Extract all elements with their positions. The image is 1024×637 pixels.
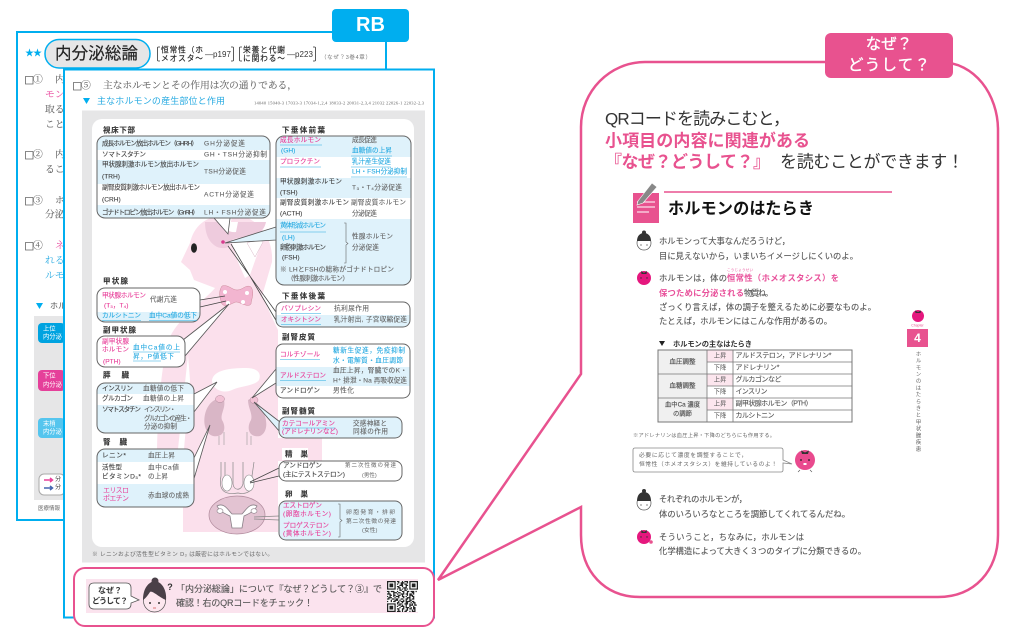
cross references: メオスタ〜 <box>161 54 203 63</box>
brain <box>205 222 266 248</box>
box: 副腎皮質: 水・電解質・血圧調節 <box>333 356 403 364</box>
dialogue 4: 化学構造によって大きく３つのタイプに分類できるの。 <box>659 546 866 556</box>
speech bubble: なぜ？どうして？: どうして？ <box>92 596 128 606</box>
checklist items: ④ <box>33 240 43 252</box>
stars: ★★ <box>25 48 42 58</box>
tab: なぜ？どうして？: なぜ？ <box>866 35 912 53</box>
box: 甲状腺: (T₃，T₄) <box>104 302 128 310</box>
dialogue 2 <box>659 267 876 326</box>
box: 腎臓: 血圧上昇 <box>148 450 175 460</box>
table: hormone functions: 上昇 <box>714 350 727 360</box>
icon: tomato large <box>795 450 815 472</box>
cross references: に関わる〜 <box>243 54 285 63</box>
hormone hierarchy sub-panel: 内分泌 <box>43 332 63 340</box>
checklist items <box>26 72 66 282</box>
box: 下垂体前葉: (ACTH) <box>280 210 302 218</box>
dialogue 2: こうじょうせい <box>727 267 754 272</box>
QR code <box>387 581 418 612</box>
table note: ※アドレナリンは血圧上昇・下降のどちらにも作用する。 <box>633 431 775 439</box>
table: hormone functions: アルドステロン，アドレナリン* <box>736 352 832 360</box>
box: 下垂体前葉: (GH) <box>281 148 295 154</box>
box: 下垂体前葉: 甲状腺刺激ホルモン <box>280 176 342 186</box>
box: 下垂体前葉: 成長促進 <box>352 135 377 144</box>
intro text: 『なぜ？どうして？』 <box>605 152 770 172</box>
panel: RB back page <box>17 32 386 520</box>
hormone hierarchy sub-panel: ホル <box>50 302 66 310</box>
box: 下垂体前葉: 分泌促進 <box>352 208 377 218</box>
eye <box>191 243 197 253</box>
prompt text: 確認！右のQRコードをチェック！ <box>176 597 313 608</box>
intro text <box>605 110 964 172</box>
box: 視床下部: GH・TSH分泌抑制 <box>204 150 267 158</box>
checklist items: ルモ <box>45 270 65 282</box>
exam references: 14040 15040-3 17033-3 17034-1,2,4 18033-2 20031-2,3,4 21032 22026-1 22032-2,3 <box>254 100 425 106</box>
box: 下垂体前葉: 性腺ホルモン <box>352 232 393 240</box>
icon: tomato <box>637 530 653 544</box>
box: 腎臓: 血中Ca値 <box>148 462 179 472</box>
checklist items: 取る <box>45 104 65 116</box>
box: 副甲状腺 <box>97 324 185 367</box>
box: 膵臓: 分泌の抑制 <box>144 422 177 430</box>
box: 膵臓: インスリン・ <box>144 406 176 414</box>
footnote: ※ レニンおよび活性型ビタミン D₃ は厳密にはホルモンではない。 <box>92 550 273 558</box>
box: 膵臓: 血糖値の上昇 <box>143 394 184 402</box>
hormone hierarchy sub-panel: 下位 <box>43 370 56 380</box>
icon: girl <box>143 578 173 612</box>
table: hormone functions: 下降 <box>714 386 727 396</box>
kidneys <box>204 399 224 436</box>
dialogue 1 <box>659 236 858 261</box>
box: 視床下部: GH分泌促進 <box>204 138 245 148</box>
table: hormone functions: 下降 <box>714 362 727 372</box>
box: 副腎髄質 <box>279 406 402 438</box>
table: hormone functions: 下降 <box>714 410 727 420</box>
box: 副腎皮質: 副腎皮質 <box>282 332 316 342</box>
box: 腎臓: 赤血球の成熟 <box>148 490 189 500</box>
box: 卵巣: 卵 巣 <box>285 488 308 498</box>
box: 精巣: 精 巣 <box>285 448 308 458</box>
chapter tab <box>907 310 928 453</box>
box: 卵巣: 第二次性徴の発達 <box>346 517 396 525</box>
table title: ホルモンの主なはたらき <box>673 340 752 348</box>
box: 腎臓: ポエチン <box>103 494 129 502</box>
box: 精巣: (男性) <box>362 471 377 479</box>
table: hormone functions: 血糖調整 <box>670 380 696 390</box>
box: 精巣: 第二次性徴の発達 <box>345 461 396 469</box>
testes <box>220 462 254 494</box>
box: 視床下部: 甲状腺刺激ホルモン放出ホルモン <box>102 160 199 168</box>
box: 卵巣: 卵胞発育・排卵 <box>346 508 395 516</box>
box: 膵臓: ソマトスタチン <box>102 404 141 414</box>
cross references: —p197 <box>205 50 232 59</box>
dialogue 2: ざっくり言えば，体の調子を整えるために必要なものよ。 <box>659 302 876 312</box>
checklist items: 内 <box>55 72 65 86</box>
box: 膵臓 <box>97 370 194 433</box>
box: 副腎髄質: カテコールアミン <box>282 420 335 428</box>
box: 卵巣: (女性) <box>362 526 378 534</box>
box: 副腎皮質 <box>276 332 410 398</box>
checklist items: モン <box>45 90 65 100</box>
box: 膵臓: グルカゴン <box>102 394 133 402</box>
checklist items: るこ <box>45 164 65 176</box>
intro text: を読むことができます！ <box>780 152 964 172</box>
table: hormone functions: インスリン <box>736 388 768 396</box>
box: 下垂体前葉: 副腎皮質ホルモン <box>351 198 406 206</box>
box: 副腎皮質: 糖新生促進，免疫抑制 <box>333 346 405 354</box>
icon: girl: ? <box>167 582 173 592</box>
box: 副甲状腺: 血中Ca値の上 <box>133 342 180 352</box>
box: 卵巣: (黄体ホルモン) <box>283 528 331 538</box>
box: 腎臓: 活性型 <box>102 462 122 472</box>
table: hormone functions: 副甲状腺ホルモン（PTH） <box>736 398 812 408</box>
tab: なぜ？どうして？ <box>825 33 953 78</box>
box: 副腎髄質: 同様の作用 <box>353 426 388 436</box>
box: 副甲状腺: 副甲状腺 <box>103 324 136 334</box>
icon: girl <box>637 489 651 510</box>
dialogue 2: 物質ね。 <box>744 288 773 298</box>
box: 視床下部: ACTH分泌促進 <box>204 190 254 198</box>
table: hormone functions: カルシトニン <box>736 412 774 420</box>
checklist items: ホ <box>55 196 65 206</box>
box: 卵巣: (卵胞ホルモン) <box>283 509 331 518</box>
box: 副腎皮質: アルドステロン <box>280 372 326 380</box>
chapter tab: ホルモンのはたらきと甲状腺疾患 <box>914 351 921 453</box>
box: 膵臓: インスリン <box>102 384 133 392</box>
table: hormone functions <box>658 350 852 422</box>
box: 下垂体後葉: バソプレシン <box>281 304 321 312</box>
box: 副甲状腺: 昇，P値低下 <box>133 352 174 360</box>
box: 下垂体前葉 <box>276 124 411 285</box>
hormone hierarchy sub-panel: 上位 <box>43 324 56 332</box>
prompt text: 「内分泌総論」について『なぜ？どうして？③』で <box>176 583 382 594</box>
box: 視床下部: 視床下部 <box>103 124 136 134</box>
box: 腎臓: ビタミンD₃* <box>102 472 141 480</box>
tab: なぜ？どうして？: どうして？ <box>848 56 930 74</box>
box: 副腎皮質: 血圧上昇，腎臓でのK・ <box>333 366 407 374</box>
box: 腎臓: レニン* <box>102 452 126 460</box>
tag: RB <box>332 9 409 42</box>
box: 副腎髄質: 交感神経と <box>353 418 387 428</box>
cross references: 恒常性（ホ <box>161 44 203 54</box>
box: 副腎皮質: コルチゾール <box>280 350 320 358</box>
callout tails <box>183 217 280 482</box>
box: 副甲状腺: ホルモン <box>102 346 129 354</box>
box: 腎臓 <box>97 436 194 507</box>
callout bubble: なぜ？どうして？ <box>438 33 998 597</box>
box: 腎臓: 腎 臓 <box>103 436 128 446</box>
box: 甲状腺: 甲状腺ホルモン <box>102 290 146 300</box>
box: 下垂体前葉: （性腺刺激ホルモン） <box>287 274 349 282</box>
page heading: ホルモンのはたらき: ホルモンのはたらき <box>668 200 814 218</box>
box: 甲状腺 <box>97 276 200 322</box>
cross references: （なぜ？3巻4章） <box>321 53 371 61</box>
panel: RB front page <box>64 70 434 618</box>
box: 膵臓: 血糖値の低下 <box>143 384 184 392</box>
box: 視床下部: ソマトスタチン <box>102 150 146 158</box>
box: 膵臓: 膵 臓 <box>103 370 130 380</box>
box: 卵巣: プロゲステロン <box>283 520 329 530</box>
box: 下垂体後葉: オキシトシン <box>281 316 321 324</box>
box: 甲状腺: 血中Ca値の低下 <box>149 310 197 320</box>
cross references: 栄養と代謝 <box>243 44 285 54</box>
statement text: 主なホルモンとその作用は次の通りである， <box>103 78 297 92</box>
box: 視床下部: ゴナドトロピン放出ホルモン（GnRH） <box>102 208 199 216</box>
table: hormone functions: 血圧調整 <box>670 356 696 366</box>
hormone hierarchy sub-panel: 末梢 <box>43 418 56 428</box>
leader lines <box>200 244 279 520</box>
speech bubble: なぜ？どうして？ <box>89 583 139 609</box>
box: 卵巣 <box>279 488 402 540</box>
box: 副腎皮質: H⁺ 排泄・Na 再吸収促進 <box>333 376 407 384</box>
heading pill: 内分泌総論: 内分泌総論 <box>55 44 138 63</box>
box: 膵臓: グルカゴンの産生・ <box>144 414 192 422</box>
speech box: 恒常性（ホメオスタシス）を維持しているのよ！ <box>639 460 777 468</box>
prompt text <box>176 583 382 608</box>
box: 下垂体後葉: 抗利尿作用 <box>334 304 369 312</box>
hormone hierarchy sub-panel: 内分泌 <box>43 426 63 436</box>
box: 腎臓: エリスロ <box>103 486 129 494</box>
statement 5 <box>74 80 91 92</box>
box: 下垂体前葉: 乳汁産生促進 <box>352 156 391 166</box>
dialogue 1: 目に見えないから，いまいちイメージしにくいのよ。 <box>659 251 858 261</box>
box: 視床下部: 成長ホルモン放出ホルモン（GHRH） <box>102 138 198 148</box>
box: 下垂体前葉: ※ LHとFSHの総称がゴナドトロピン <box>280 264 394 274</box>
cross references <box>158 44 371 63</box>
checklist items: ① <box>33 74 43 86</box>
dialogue 1: ホルモンって大事なんだろうけど， <box>659 236 790 246</box>
heading pill: 内分泌総論 <box>45 40 150 68</box>
dialogue 3 <box>659 494 850 519</box>
icon: girl <box>637 230 651 250</box>
page heading: ホルモンのはたらき <box>633 183 892 223</box>
dialogue 4 <box>659 532 866 556</box>
box: 副腎髄質: (アドレナリンなど) <box>282 428 338 436</box>
chapter tab: 4 <box>914 331 921 345</box>
box: 卵巣: エストロゲン <box>283 500 322 510</box>
checklist items: れる <box>45 254 65 266</box>
figure heading: 主なホルモンの産生部位と作用 <box>97 95 225 106</box>
box: 副腎髄質: 副腎髄質 <box>282 406 316 416</box>
box: 下垂体後葉: 下垂体後葉 <box>282 290 326 300</box>
dialogue 3: 体のいろいろなところを調節してくれてるんだね。 <box>659 509 850 519</box>
box: 下垂体前葉: 下垂体前葉 <box>282 124 326 134</box>
box: 下垂体前葉: 副腎皮質刺激ホルモン <box>280 198 349 206</box>
box: 視床下部: (TRH) <box>102 174 120 180</box>
box: 視床下部: TSH分泌促進 <box>204 166 246 176</box>
hormone hierarchy sub-panel: 分 <box>55 483 61 491</box>
box: 腎臓: の上昇 <box>148 472 168 480</box>
box: 副甲状腺: (PTH) <box>103 358 121 366</box>
table: hormone functions: アドレナリン* <box>736 364 780 372</box>
box: 下垂体前葉: (FSH) <box>282 254 300 262</box>
hormone hierarchy sub-panel: 内分泌 <box>43 380 63 388</box>
box: 下垂体前葉: LH・FSH分泌抑制 <box>352 166 407 176</box>
box: 副腎皮質: 男性化 <box>333 386 354 394</box>
illustration: body <box>157 214 322 534</box>
box: 下垂体前葉: プロラクチン <box>280 158 320 166</box>
checklist items: こと <box>45 118 65 130</box>
table: hormone functions: の調節 <box>673 408 692 418</box>
box: 甲状腺: 甲状腺 <box>103 276 128 286</box>
tag: RB: RB <box>356 14 385 36</box>
table: hormone functions: 上昇 <box>714 398 727 408</box>
icon: tomato small <box>912 310 924 322</box>
box: 精巣: アンドロゲン <box>283 460 322 470</box>
box: 下垂体後葉 <box>276 290 410 327</box>
box: 視床下部 <box>97 124 270 218</box>
box: 下垂体前葉: 黄体形成ホルモン <box>280 220 326 230</box>
checklist items: ② <box>33 148 43 160</box>
icon: tomato <box>637 271 651 285</box>
box: 甲状腺: 代謝亢進 <box>150 294 177 304</box>
dialogue 2: たとえば，ホルモンにはこんな作用があるの。 <box>659 316 832 326</box>
hormone hierarchy sub-panel: 医療情報 <box>38 504 61 512</box>
checklist items: 内 <box>55 148 65 160</box>
box: 精巣 <box>279 448 402 481</box>
checklist items: ③ <box>33 194 43 206</box>
table: hormone functions: グルカゴンなど <box>736 374 782 384</box>
box: 甲状腺: カルシトニン <box>102 312 141 320</box>
anatomy figure background <box>82 110 425 562</box>
box: 下垂体前葉: (LH) <box>282 234 295 242</box>
intro text: QRコードを読みこむと， <box>605 110 790 128</box>
box: 下垂体前葉: 分泌促進 <box>352 242 379 252</box>
hormone hierarchy sub-panel: 分 <box>55 475 61 483</box>
box: 視床下部: LH・FSH分泌促進 <box>204 208 266 216</box>
box: 下垂体前葉: 成長ホルモン <box>280 135 321 144</box>
box: 下垂体前葉: T₃・T₄分泌促進 <box>352 182 402 192</box>
speech box: 必要に応じて濃度を調整することで， <box>639 451 747 459</box>
chapter tab: Chapter <box>911 324 925 328</box>
box: 視床下部: 副腎皮質刺激ホルモン放出ホルモン <box>102 182 200 192</box>
statement 5: ⑤ <box>81 80 91 92</box>
dialogue 2: 恒常性（ホメオスタシス）を <box>727 273 839 283</box>
table: hormone functions: 上昇 <box>714 374 727 384</box>
checklist items: ネ <box>55 240 65 252</box>
cross references: —p223 <box>287 50 314 59</box>
dialogue 2: ホルモンは，体の <box>659 273 727 283</box>
box: 副腎皮質: アンドロゲン <box>280 386 320 394</box>
thyroid <box>220 286 253 306</box>
box: 精巣: (主にテストステロン) <box>283 470 345 478</box>
uterus <box>209 496 265 534</box>
box: 視床下部: (CRH) <box>102 196 121 204</box>
intro text: 小項目の内容に関連がある <box>605 130 810 150</box>
box: 下垂体前葉: 血糖値の上昇 <box>352 146 392 154</box>
dialogue 4: そういうこと，ちなみに，ホルモンは <box>659 532 804 542</box>
speech box <box>633 448 792 472</box>
speech bubble: なぜ？どうして？: なぜ？ <box>98 586 122 595</box>
dialogue 3: それぞれのホルモンが， <box>659 494 747 504</box>
checklist items: 分泌 <box>45 208 66 220</box>
table: hormone functions: 血中Ca 濃度 <box>665 400 701 408</box>
box: 下垂体後葉: 乳汁射出, 子宮収縮促進 <box>334 314 407 324</box>
box: 下垂体前葉: 卵胞刺激ホルモン <box>280 242 326 252</box>
hormone hierarchy sub-panel <box>34 302 66 512</box>
panel: QR prompt <box>74 568 434 626</box>
box: 下垂体前葉: (TSH) <box>280 190 298 196</box>
pancreas <box>212 368 260 392</box>
box: 副甲状腺: 副甲状腺 <box>102 336 129 346</box>
dialogue 2: 保つために分泌される <box>659 288 744 298</box>
